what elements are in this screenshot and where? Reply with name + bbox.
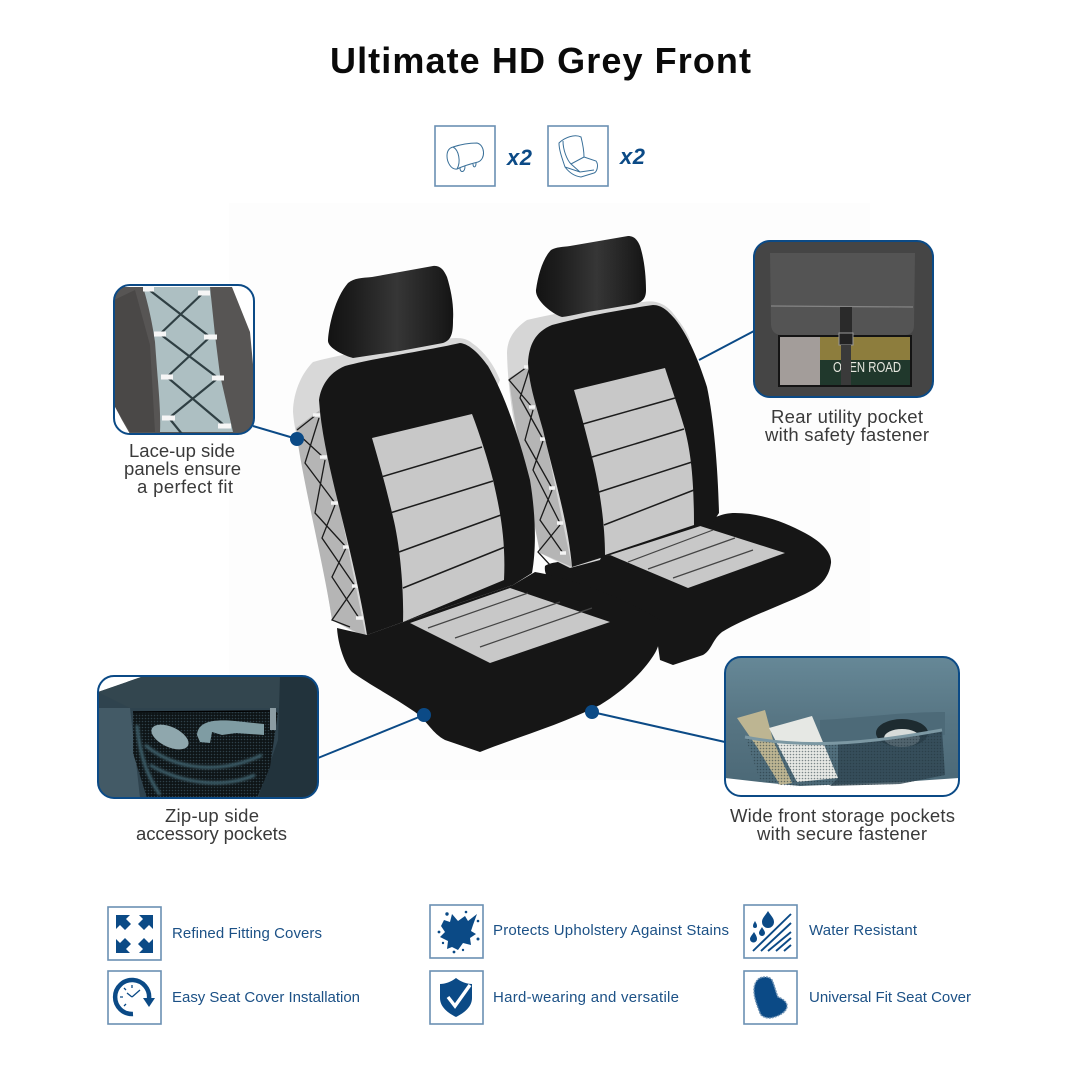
label: Protects Upholstery Against Stains — [493, 922, 729, 939]
label: Universal Fit Seat Cover — [809, 989, 971, 1006]
left seat backrest insert — [372, 414, 505, 622]
detail photo: lacing — [114, 285, 254, 434]
connector dot — [417, 708, 431, 722]
left seat cushion insert — [410, 588, 610, 663]
left seat cushion — [337, 572, 660, 752]
label: Refined Fitting Covers — [172, 925, 322, 942]
right seat cushion — [545, 513, 831, 665]
icon: shield with check — [430, 971, 483, 1024]
caption: with secure fastener — [756, 823, 927, 844]
product photo: pair of front seat covers — [229, 203, 870, 780]
right seat backrest insert — [574, 368, 694, 555]
callout: rear utility pocket — [699, 241, 933, 445]
label: Hard-wearing and versatile — [493, 989, 679, 1006]
connector line — [253, 426, 297, 439]
icon: four arrows — [108, 907, 161, 960]
feature: water resistant — [744, 905, 918, 958]
icon: stain splat — [430, 905, 483, 958]
feature: protects upholstery against stains — [430, 905, 729, 958]
caption: accessory pockets — [136, 823, 287, 844]
connector dot — [585, 705, 599, 719]
left seat — [293, 266, 660, 752]
detail photo: front pocket — [725, 657, 959, 796]
callout: zip-up side accessory pockets — [98, 676, 431, 844]
icon: seat cover — [548, 126, 608, 186]
right seat cushion insert — [610, 525, 785, 588]
caption: with safety fastener — [764, 424, 929, 445]
title: Ultimate HD Grey Front — [330, 40, 751, 81]
quantity: seats x2: x2 — [619, 144, 646, 169]
callout: wide front storage pockets — [585, 657, 959, 844]
icon: water drops and diagonal lines — [744, 905, 797, 958]
photo frame — [754, 241, 933, 397]
detail photo: pocket: OPEN ROAD — [833, 359, 901, 376]
icon: clock with arrow — [108, 971, 161, 1024]
detail photo: pocket — [754, 241, 933, 397]
photo frame — [725, 657, 959, 796]
feature: easy installation — [108, 971, 360, 1024]
quantity: headrests x2: x2 — [506, 145, 533, 170]
connector line — [592, 712, 725, 742]
contents: included items — [435, 126, 646, 186]
feature: universal fit seat cover — [744, 971, 971, 1024]
left seat headrest — [328, 266, 453, 358]
connector dot — [290, 432, 304, 446]
caption: Zip-up side — [165, 805, 259, 826]
icon: seat silhouette — [744, 971, 797, 1024]
left seat backrest — [319, 343, 535, 635]
right seat — [507, 236, 831, 665]
caption: Wide front storage pockets — [730, 805, 955, 826]
left seat lace-up side — [293, 338, 500, 640]
photo frame — [98, 676, 318, 798]
connector line — [318, 715, 424, 758]
detail photo: zip pocket — [98, 676, 318, 798]
right seat backrest — [528, 305, 719, 567]
label: Water Resistant — [809, 922, 918, 939]
caption: panels ensure — [124, 458, 241, 479]
feature: hard-wearing and versatile — [430, 971, 679, 1024]
caption: a perfect fit — [137, 476, 233, 497]
feature: refined fitting covers — [108, 907, 322, 960]
callout: lace-up side panels — [114, 285, 304, 497]
caption: Lace-up side — [129, 440, 235, 461]
right seat lace-up side — [507, 301, 690, 568]
connector line — [699, 331, 754, 360]
label: Easy Seat Cover Installation — [172, 989, 360, 1006]
caption: Rear utility pocket — [771, 406, 923, 427]
icon: headrest cover — [435, 126, 495, 186]
photo frame — [114, 285, 254, 434]
right seat headrest — [536, 236, 646, 317]
